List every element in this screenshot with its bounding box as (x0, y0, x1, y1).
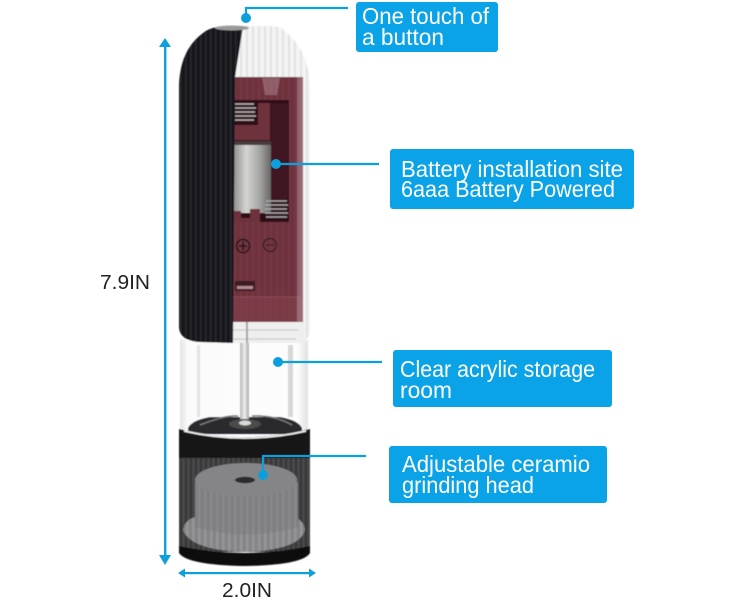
callout: grinding head (258, 446, 607, 503)
callout: storage room: Clear acrylic storage (400, 356, 595, 382)
black foot (179, 546, 310, 566)
grinder cap, white translucent half (232, 26, 310, 343)
callout: one touch (241, 2, 498, 52)
callout: one touch: One touch of (362, 3, 490, 29)
top button (215, 26, 249, 30)
battery compartment (233, 100, 289, 222)
callout: battery (271, 149, 634, 209)
base collar (179, 429, 310, 458)
slide switch (235, 281, 255, 291)
clear collar (233, 322, 305, 343)
ribbed translucent base (179, 458, 310, 552)
minus symbol (264, 238, 276, 252)
callout: grinding head: Adjustable ceramio (402, 451, 590, 477)
callout: battery: Battery installation site (401, 156, 623, 182)
product: pepper grinder (179, 26, 310, 566)
width dimension arrow (178, 568, 316, 578)
plus symbol (236, 240, 250, 252)
grey ceramic grinding head (183, 463, 305, 552)
callout: battery: 6aaa Battery Powered (401, 176, 615, 202)
grinder cap, black half (179, 26, 243, 343)
acrylic storage chamber (180, 340, 308, 434)
callout: one touch: a button (362, 24, 444, 50)
maroon inner housing (233, 77, 304, 322)
callout: storage room (273, 350, 612, 407)
height label: 7.9IN (100, 272, 150, 294)
callout: grinding head: grinding head (402, 472, 534, 498)
callout: storage room: room (400, 377, 452, 403)
motor (233, 141, 271, 213)
height dimension arrow (159, 38, 171, 565)
